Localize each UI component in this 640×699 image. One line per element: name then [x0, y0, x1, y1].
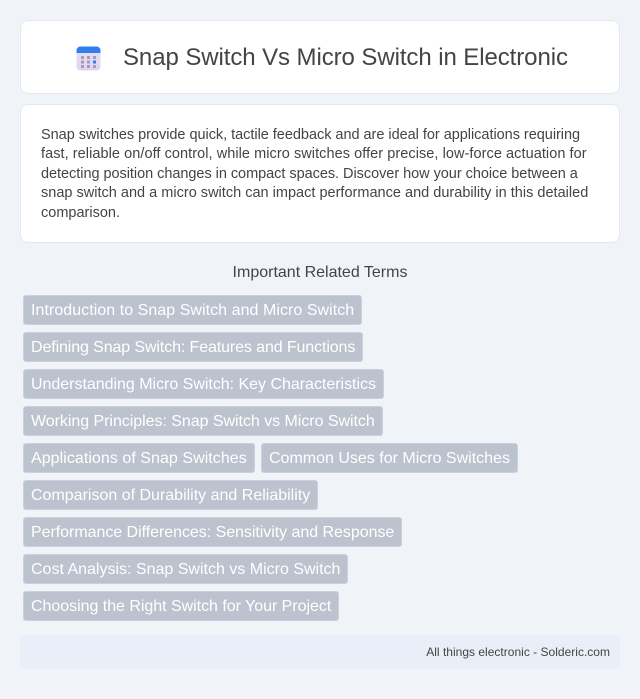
summary text: fast, reliable on/off control, while micro switches offer precise, low-force actuation for	[41, 146, 587, 162]
footer bar	[20, 635, 620, 669]
tag	[23, 591, 339, 621]
tag	[23, 480, 318, 510]
tag	[23, 295, 362, 325]
tag: Comparison of Durability and Reliability	[31, 487, 310, 504]
tag	[23, 406, 383, 436]
tag	[23, 517, 402, 547]
footer text: All things electronic - Solderic.com	[426, 645, 610, 659]
summary text: comparison.	[41, 205, 120, 221]
summary panel	[20, 104, 620, 243]
related terms tags	[23, 295, 518, 621]
summary text	[41, 127, 588, 221]
tag	[23, 443, 255, 473]
summary text: Snap switches provide quick, tactile feedback and are ideal for applications requiring	[41, 127, 580, 143]
tag: Performance Differences: Sensitivity and Response	[31, 524, 394, 541]
icon: calendar	[76, 46, 100, 70]
tag: Common Uses for Micro Switches	[269, 450, 510, 467]
tag	[23, 369, 384, 399]
tag	[261, 443, 518, 473]
tag	[23, 332, 363, 362]
tag: Defining Snap Switch: Features and Functions	[31, 339, 355, 356]
tag: Understanding Micro Switch: Key Characteristics	[31, 376, 376, 393]
header panel	[20, 20, 620, 94]
tag: Cost Analysis: Snap Switch vs Micro Switch	[31, 561, 340, 578]
summary text: detecting position changes in compact spaces. Discover how your choice between a	[41, 166, 578, 182]
tag: Applications of Snap Switches	[31, 450, 247, 467]
summary text: snap switch and a micro switch can impact performance and durability in this detailed	[41, 185, 588, 201]
related terms heading: Important Related Terms	[233, 264, 407, 281]
tag: Introduction to Snap Switch and Micro Switch	[31, 302, 354, 319]
title: Snap Switch Vs Micro Switch in Electronic	[123, 44, 568, 71]
tag: Working Principles: Snap Switch vs Micro Switch	[31, 413, 375, 430]
tag	[23, 554, 348, 584]
tag: Choosing the Right Switch for Your Project	[31, 598, 331, 615]
